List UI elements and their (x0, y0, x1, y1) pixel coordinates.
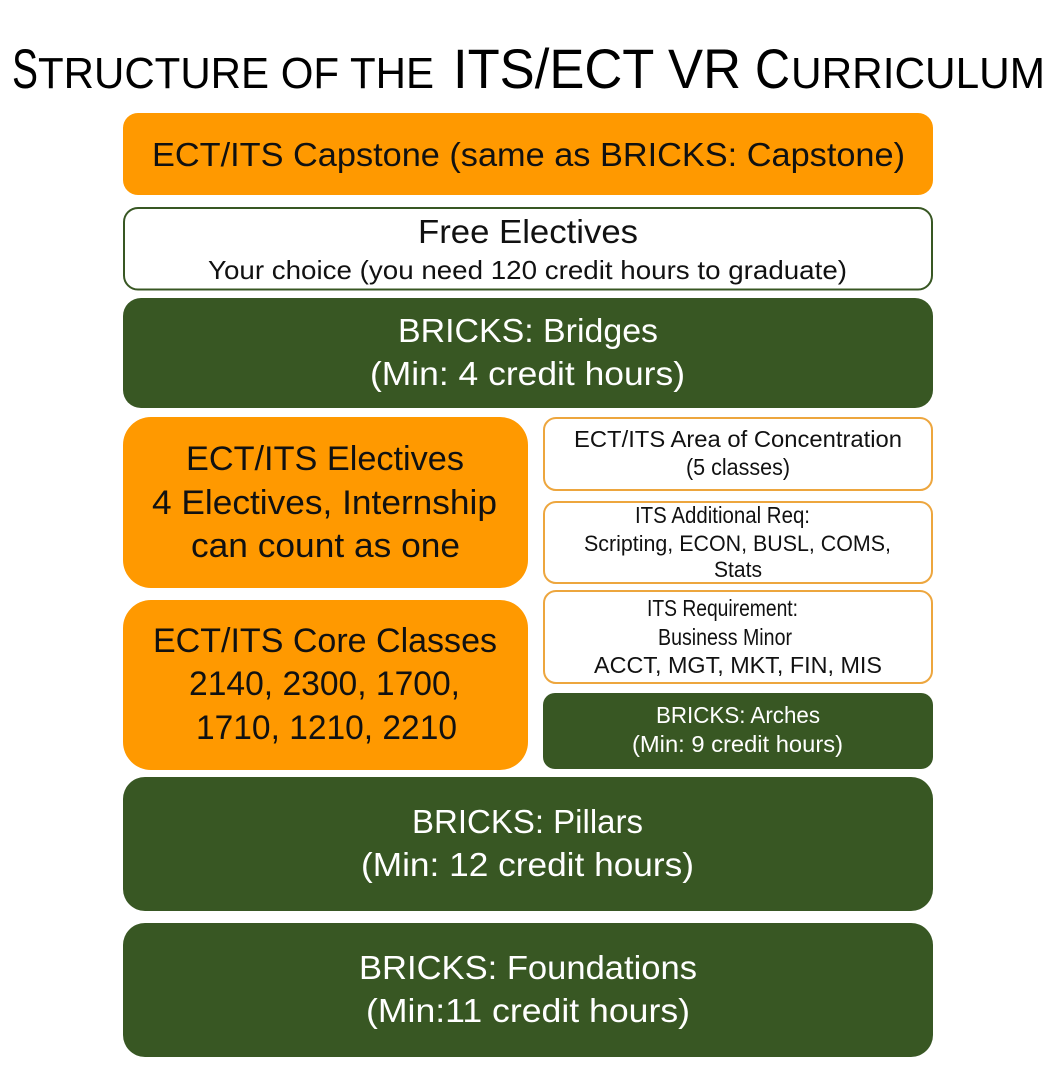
panel: free electives (124, 208, 932, 290)
panel: capstone: ECT/ITS Capstone (same as BRICKS: Capstone) (152, 136, 905, 173)
panel: bricks arches: BRICKS: Arches (656, 702, 820, 728)
panel: additional requirements: Scripting, ECON, BUSL, COMS, (584, 531, 891, 556)
panel: bricks bridges (123, 298, 933, 408)
panel: bricks foundations: (Min:11 credit hours) (366, 992, 690, 1029)
panel: bricks bridges: BRICKS: Bridges (398, 312, 658, 349)
panel: bricks foundations (123, 923, 933, 1057)
panel: business minor (544, 591, 932, 683)
title: C (755, 37, 790, 100)
panel: core classes: ECT/ITS Core Classes (153, 622, 497, 660)
panel: core classes: 2140, 2300, 1700, (189, 665, 460, 703)
panel: bricks pillars (123, 777, 933, 911)
panel: free electives: Your choice (you need 120 credit hours to graduate) (208, 255, 847, 285)
title: URRICULUM (791, 49, 1045, 98)
panel: capstone (123, 113, 933, 195)
panel: ects electives: 4 Electives, Internship (152, 484, 497, 522)
title: ITS/ECT VR (453, 37, 741, 100)
panel: bricks pillars: (Min: 12 credit hours) (361, 846, 694, 883)
panel: business minor: ACCT, MGT, MKT, FIN, MIS (594, 652, 882, 678)
panel: additional requirements: ITS Additional Req: (635, 502, 810, 528)
title: S (12, 37, 38, 100)
panel: bricks foundations: BRICKS: Foundations (359, 949, 697, 986)
panel: area of concentration (544, 418, 932, 490)
panel: additional requirements (544, 502, 932, 583)
panel: bricks arches (543, 693, 933, 769)
panel: ects electives: can count as one (191, 527, 460, 565)
panel: additional requirements: Stats (714, 557, 762, 582)
panel: core classes: 1710, 1210, 2210 (196, 709, 457, 747)
panel: ects electives: ECT/ITS Electives (186, 440, 464, 478)
title (12, 37, 1045, 100)
panel: bricks bridges: (Min: 4 credit hours) (370, 355, 685, 392)
panel: business minor: ITS Requirement: (647, 595, 798, 621)
panel: area of concentration: (5 classes) (686, 454, 790, 480)
panel: area of concentration: ECT/ITS Area of Concentration (574, 426, 902, 452)
panel: core classes (123, 600, 528, 770)
panel: ects electives (123, 417, 528, 588)
panel: bricks pillars: BRICKS: Pillars (412, 803, 643, 840)
title: TRUCTURE OF THE (38, 49, 434, 98)
panel: business minor: Business Minor (658, 624, 792, 650)
panel: free electives: Free Electives (418, 213, 638, 250)
panel: bricks arches: (Min: 9 credit hours) (632, 731, 843, 757)
